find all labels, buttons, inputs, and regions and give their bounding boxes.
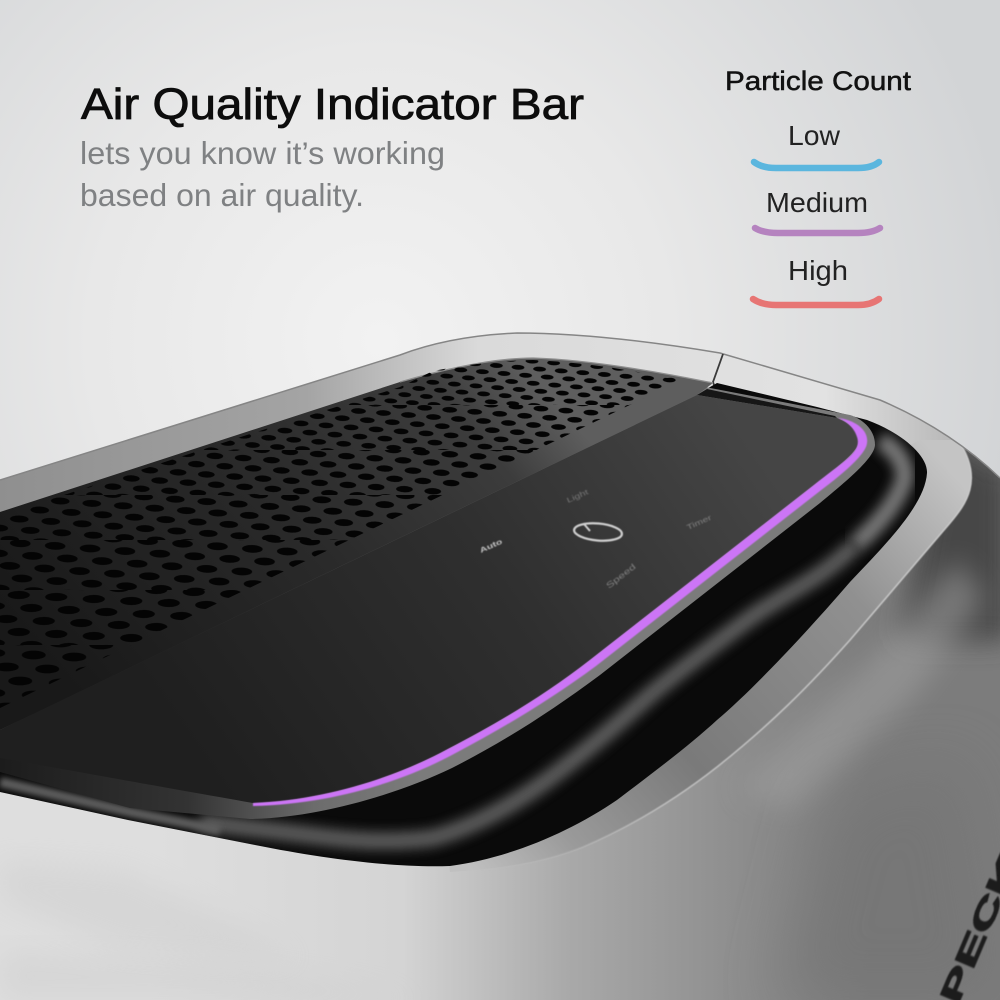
legend item: high xyxy=(753,255,879,305)
rim top surface xyxy=(0,333,958,730)
perforated grille dots xyxy=(0,360,686,708)
legend item: medium xyxy=(755,187,880,233)
legend item: medium: Medium xyxy=(766,187,868,218)
legend item: low xyxy=(754,120,879,168)
panel edge band xyxy=(0,386,875,819)
body shading xyxy=(0,333,1000,1000)
purple air quality light bar xyxy=(253,418,867,806)
rim outer edge xyxy=(0,333,1000,480)
grille plate xyxy=(0,358,713,730)
legend heading: Particle Count xyxy=(725,66,912,96)
power button icon xyxy=(573,521,623,543)
legend item: high: High xyxy=(788,255,848,286)
rim side wedge xyxy=(508,440,972,858)
subtitle text: lets you know it’s working xyxy=(80,135,445,171)
subtitle text xyxy=(80,135,445,213)
touch label: Light: Light xyxy=(565,488,590,504)
touch label: Speed: Speed xyxy=(605,562,638,591)
device body xyxy=(0,333,1000,1000)
control panel top surface xyxy=(0,395,859,803)
rim inner light line xyxy=(559,448,973,855)
legend: particle count xyxy=(725,66,912,305)
grille edge line xyxy=(400,358,713,383)
seam xyxy=(713,354,723,396)
bezel highlights xyxy=(0,440,905,841)
touch label: Timer: Timer xyxy=(685,513,713,531)
air purifier device xyxy=(0,333,1000,1000)
touch label: Auto: Auto xyxy=(478,537,504,554)
subtitle text: based on air quality. xyxy=(80,177,364,213)
black bezel xyxy=(0,383,927,866)
legend item: low: Low xyxy=(788,120,841,151)
panel shadow strip xyxy=(697,389,837,418)
title: Air Quality Indicator Bar xyxy=(81,80,584,129)
